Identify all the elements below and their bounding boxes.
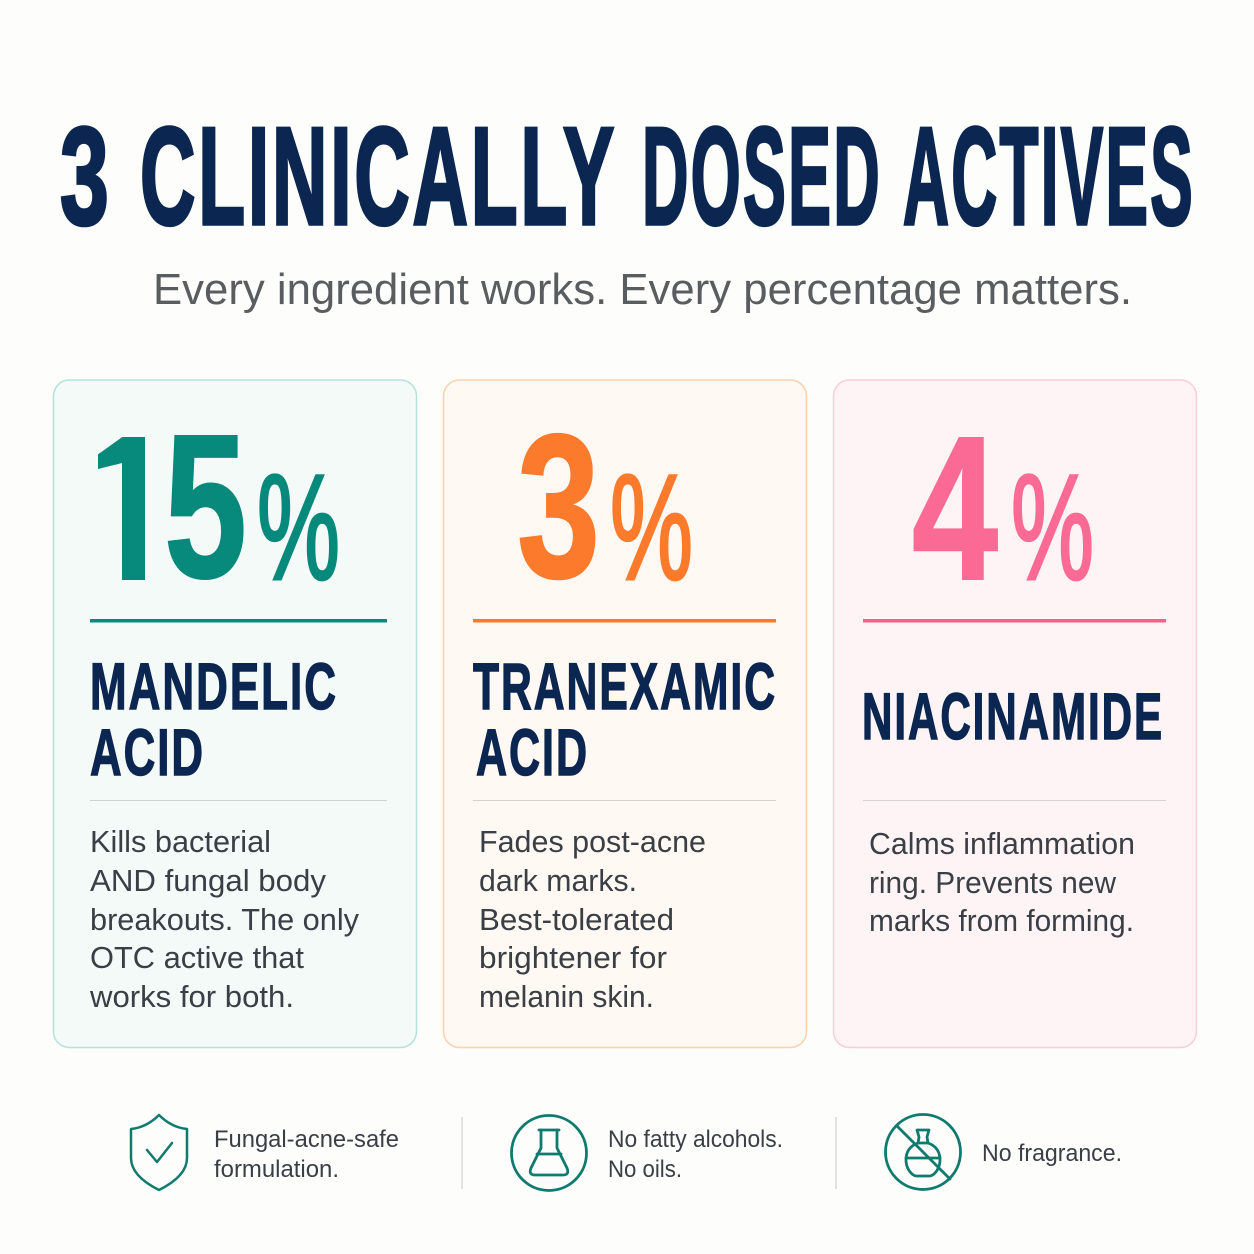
description: mandelic acid: Kills bacterial	[90, 824, 271, 859]
heading: mandelic acid: MANDELIC	[90, 649, 338, 723]
stat: 15%	[98, 435, 338, 582]
description: mandelic acid: breakouts. The only	[90, 902, 359, 937]
description: niacinamide	[869, 826, 1135, 938]
description: mandelic acid: works for both.	[89, 979, 294, 1014]
feature: fungal-acne-safe: formulation.	[214, 1156, 339, 1183]
description: niacinamide: Calms inflammation	[869, 826, 1135, 861]
stat: 4%: %	[1011, 443, 1094, 611]
stat: 4%: 4	[912, 394, 998, 623]
stat: 15%: 5	[164, 392, 247, 621]
feature: no fatty alcohols, no oils	[608, 1126, 783, 1183]
stat: 3%	[517, 392, 693, 621]
feature: fungal-acne-safe	[214, 1126, 399, 1183]
heading: tranexamic acid: TRANEXAMIC	[473, 649, 777, 723]
stat: 4%	[912, 394, 1094, 623]
description: tranexamic acid: melanin skin.	[479, 979, 654, 1014]
feature: no fatty alcohols, no oils: No oils.	[608, 1156, 682, 1183]
heading: tranexamic acid	[473, 649, 777, 789]
stat: 3%: %	[610, 443, 693, 611]
feature: no fatty alcohols, no oils: No fatty alcohols.	[608, 1126, 783, 1153]
description: niacinamide: marks from forming.	[869, 903, 1134, 938]
heading: tranexamic acid: ACID	[476, 715, 589, 789]
icon: crossed-out fragrance bottle	[886, 1114, 960, 1190]
panel: tranexamic acid	[444, 380, 806, 1048]
subtitle: Every ingredient works. Every percentage matters.	[153, 265, 1132, 314]
stat: 3%: 3	[517, 392, 600, 621]
stat: 15%: %	[257, 443, 340, 611]
description: tranexamic acid: Fades post-acne	[479, 824, 706, 859]
title: CLINICALLY	[140, 99, 617, 254]
description: tranexamic acid: brightener for	[479, 940, 667, 975]
icon: flask	[512, 1116, 586, 1190]
panel: niacinamide	[834, 380, 1196, 1048]
description: tranexamic acid: dark marks.	[479, 863, 637, 898]
description: tranexamic acid	[479, 824, 706, 1014]
description: tranexamic acid: Best-tolerated	[479, 902, 674, 937]
feature: no fragrance: No fragrance.	[982, 1140, 1122, 1167]
icon: shield with check	[131, 1115, 187, 1190]
title: 3	[60, 99, 112, 254]
title: DOSED	[642, 99, 882, 254]
feature: fungal-acne-safe: Fungal-acne-safe	[214, 1126, 399, 1153]
description: mandelic acid	[89, 824, 359, 1014]
heading: mandelic acid: ACID	[90, 715, 205, 789]
description: mandelic acid: AND fungal body	[90, 863, 326, 898]
description: mandelic acid: OTC active that	[90, 940, 304, 975]
description: niacinamide: ring. Prevents new	[869, 865, 1117, 900]
stat: 15%: 1	[78, 394, 181, 623]
heading: mandelic acid	[90, 649, 338, 789]
panel: mandelic acid	[54, 380, 416, 1048]
